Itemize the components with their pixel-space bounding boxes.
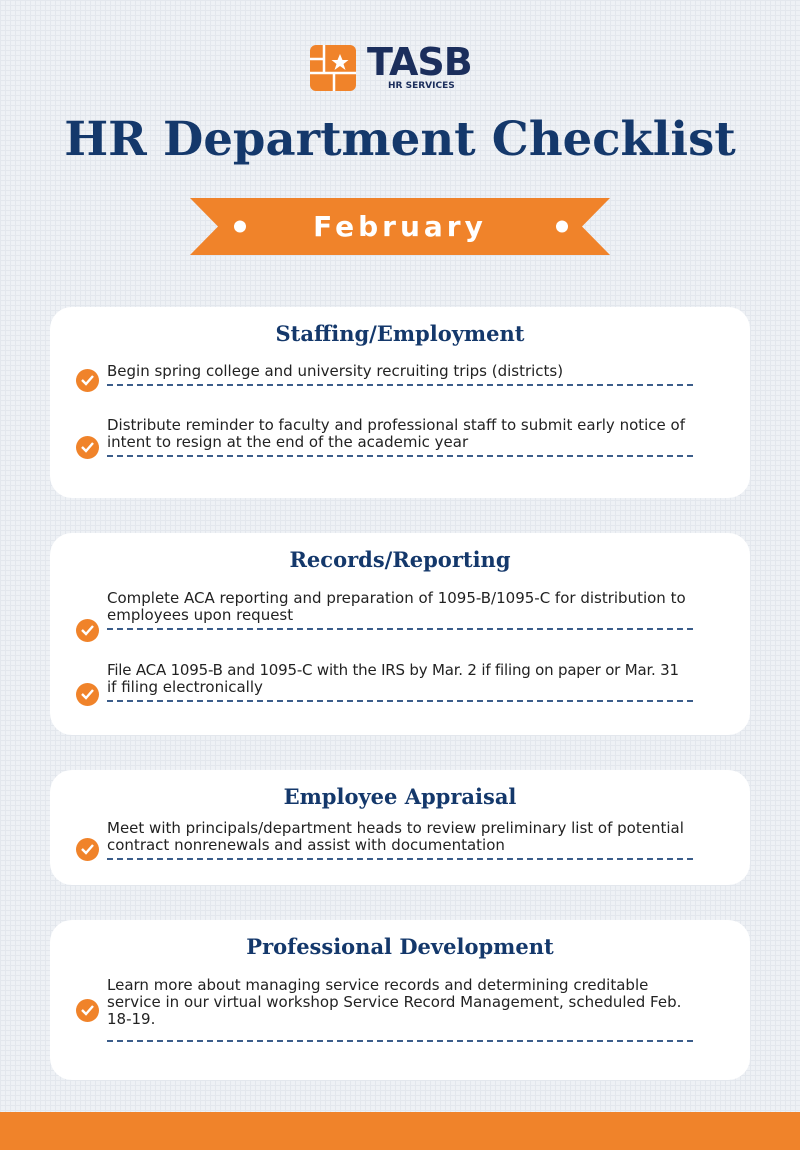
item 1: Complete ACA reporting and preparation of 1095-B/1095-C for distribution to employees upon request [107, 589, 686, 624]
item 2: File ACA 1095-B and 1095-C with the IRS by Mar. 2 if filing on paper or Mar. 31 [107, 661, 679, 679]
panel: professional development [50, 920, 750, 1080]
item 2: if filing electronically [107, 678, 263, 696]
banner: February: February [313, 210, 487, 243]
panel: appraisal [50, 770, 750, 885]
title: HR Department Checklist [64, 111, 736, 166]
panel: staffing: Staffing/Employment [276, 321, 524, 346]
item 1 [107, 363, 693, 386]
panel: professional development: Professional Development [246, 934, 554, 959]
panel: appraisal: Employee Appraisal [284, 784, 516, 809]
logo [310, 40, 472, 91]
item: Meet with principals/department heads to review preliminary list of potential contract nonrenewals and assist with documentation [107, 819, 684, 854]
logo: HR SERVICES [388, 81, 455, 91]
panel: records [50, 533, 750, 735]
panel: records: Records/Reporting [289, 547, 511, 572]
icon: logo mark [310, 45, 356, 91]
item 2: Distribute reminder to faculty and professional staff to submit early notice of intent to resign at the end of the academic year [107, 416, 685, 451]
footer bar [0, 1112, 800, 1150]
item 2 [107, 662, 693, 702]
logo text: TASB [367, 40, 472, 84]
banner: February [190, 198, 610, 255]
panel: staffing [50, 307, 750, 498]
item 1: Begin spring college and university recruiting trips (districts) [107, 362, 563, 380]
item: Learn more about managing service records and determining creditable service in our virtual workshop Service Record Management, scheduled Feb. 18-19. [107, 976, 681, 1028]
